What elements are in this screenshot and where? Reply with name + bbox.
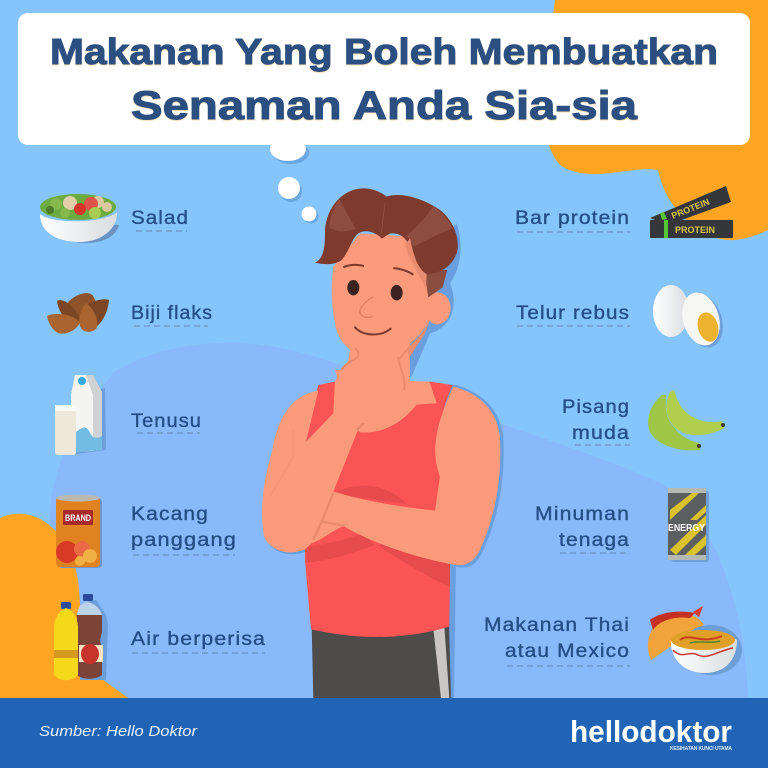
- item: minuman tenaga: [535, 488, 709, 562]
- label: Bar protein: Bar protein: [515, 208, 630, 229]
- title panel: [18, 13, 750, 145]
- sideburn: [424, 270, 447, 297]
- icon: baked beans can: [56, 494, 102, 568]
- icon: boiled eggs: [653, 285, 729, 352]
- left arm: [262, 370, 407, 552]
- label: Minuman tenaga: [535, 504, 630, 551]
- tank folds: [306, 533, 375, 563]
- eyebrows: [343, 265, 413, 275]
- hand on chin: [333, 352, 406, 423]
- label: Minuman tenaga: Minuman: [535, 504, 630, 525]
- icon: protein bars: PROTEIN: [675, 225, 715, 235]
- icon: protein bars: PROTEIN: [670, 197, 711, 221]
- icon: flax seeds: [47, 293, 109, 334]
- icon: energy can: ENERGY: [668, 523, 705, 534]
- body: [262, 370, 504, 698]
- hair: [315, 188, 458, 274]
- label: Pisang muda: Pisang: [562, 397, 630, 418]
- item: air berperisa: [54, 594, 266, 680]
- icon: green bananas: [648, 390, 725, 450]
- mouth: [355, 327, 391, 334]
- icon: protein bars: [650, 186, 733, 238]
- head: [315, 188, 461, 423]
- icon: flavoured drink bottles: [54, 594, 108, 680]
- tank top: [305, 382, 453, 637]
- orange shape: bottom left: [0, 514, 128, 698]
- title: Senaman Anda Sia-sia: [131, 84, 638, 128]
- right arm: [307, 387, 500, 565]
- body shadow: [407, 382, 504, 698]
- arm creases: [313, 390, 425, 540]
- item: kacang panggang: [56, 494, 237, 568]
- footer bar: [0, 698, 768, 768]
- face: [332, 233, 430, 357]
- source note: Sumber: Hello Doktor: [39, 723, 198, 740]
- item: salad: [40, 194, 189, 243]
- item: pisang muda: [562, 390, 725, 450]
- label: Minuman tenaga: tenaga: [559, 530, 630, 551]
- label: Kacang panggang: panggang: [131, 530, 237, 551]
- background blob: [50, 343, 748, 698]
- head shadow: [407, 223, 461, 377]
- nose: [360, 297, 373, 317]
- label: Kacang panggang: Kacang: [131, 504, 209, 525]
- label: Air berperisa: Air berperisa: [131, 629, 266, 650]
- pants stripe: [433, 626, 449, 698]
- icon: taco and noodle bowl: [648, 606, 742, 675]
- item: tenusu: [55, 375, 202, 455]
- title: [50, 31, 718, 128]
- hair highlights: [329, 199, 356, 231]
- neck: [340, 327, 437, 410]
- icon: baked beans can: BRAND: [65, 513, 91, 523]
- label: Tenusu: Tenusu: [131, 411, 202, 432]
- item: telur rebus: [516, 285, 729, 352]
- icon: salad bowl: [40, 194, 119, 243]
- label: Biji flaks: Biji flaks: [131, 303, 213, 324]
- neck and collar: [335, 370, 430, 433]
- title: Makanan Yang Boleh Membuatkan: [50, 31, 718, 72]
- label: Pisang muda: [562, 397, 630, 444]
- label: Pisang muda: muda: [572, 423, 630, 444]
- logo: KESIHATAN KUNCI UTAMA: [670, 746, 732, 752]
- eyes: [347, 280, 359, 295]
- label: Makanan Thai atau Mexico: [484, 615, 630, 662]
- pants: [312, 623, 451, 698]
- label: Kacang panggang: [131, 504, 237, 551]
- forehead shading: [405, 238, 427, 290]
- item: bar protein: [515, 186, 733, 238]
- label: Telur rebus: Telur rebus: [516, 303, 630, 324]
- label: Makanan Thai atau Mexico: Makanan Thai: [484, 615, 630, 636]
- item: makanan thai atau mexico: [484, 606, 742, 675]
- ear: [424, 292, 451, 324]
- thought bubbles: [270, 137, 318, 224]
- item: biji flaks: [47, 293, 213, 334]
- label: Makanan Thai atau Mexico: atau Mexico: [505, 641, 630, 662]
- label: Salad: Salad: [131, 208, 189, 229]
- icon: energy can: [668, 488, 709, 562]
- character: [262, 188, 504, 698]
- logo: hellodoktor: [570, 714, 732, 749]
- orange shape: top right: [543, 0, 768, 240]
- icon: milk carton: [55, 375, 106, 455]
